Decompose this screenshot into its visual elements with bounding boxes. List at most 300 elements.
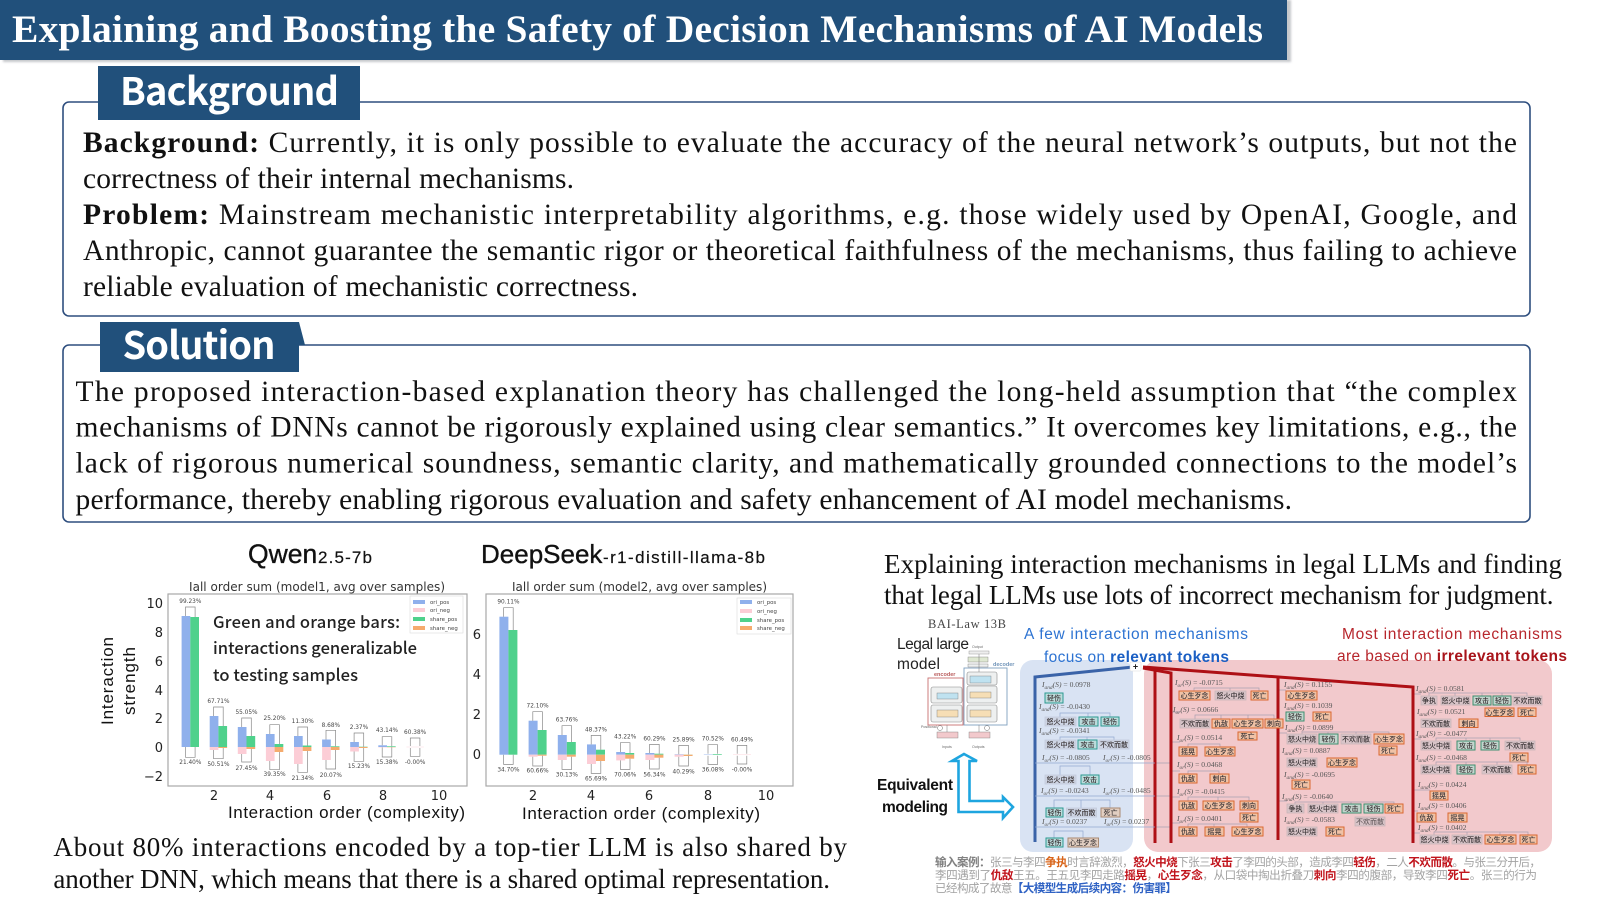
legend: ori_neg	[430, 608, 450, 614]
mechanism: -0.0640: 争执	[1288, 804, 1302, 814]
x axis title: Interaction order (complexity)	[228, 803, 465, 822]
bars: order 7	[673, 738, 695, 776]
mechanism: 0.0899: 不欢而散	[1342, 734, 1370, 744]
mechanism: -0.0805: (S)	[1110, 753, 1120, 762]
bar chart: Qwen interaction strength: Iall order sum (model1, avg over samples)	[189, 580, 445, 594]
mechanism: 0.1039: 死亡	[1315, 712, 1329, 722]
caption: legal LLM mechanisms: that legal LLMs use lots of incorrect mechanism for judgment.	[884, 580, 1554, 610]
mechanism: -0.0430: (S)	[1050, 702, 1059, 711]
mechanism: 0.0401: (S)	[1184, 814, 1194, 823]
bars: order 6	[320, 723, 342, 779]
text block: solution	[76, 376, 1517, 516]
bars: order 9: -0.00%	[732, 768, 753, 774]
encoder block: Positional	[921, 725, 937, 729]
y axis tick labels: 0	[155, 741, 163, 756]
label: equivalent modeling: Equivalent	[877, 777, 953, 794]
bars: order 6: 56.34%	[643, 773, 666, 779]
bars: order 9: 60.49%	[731, 738, 754, 744]
mechanism: 0.0406: 仇敌	[1420, 813, 1434, 823]
heading: relevant tokens	[1024, 626, 1248, 666]
bars: order 2: 67.71%	[207, 699, 230, 705]
mechanism: 0.0237: 轻伤	[1048, 838, 1062, 848]
caption: legal LLM mechanisms: Explaining interaction mechanisms in legal LLMs and finding	[884, 549, 1562, 579]
mechanism: -0.0243: I	[1102, 786, 1106, 795]
bars: order 3: 63.76%	[556, 718, 578, 724]
bars: order 7: 2.37%	[350, 725, 369, 731]
text block: background and problem: correctness of their internal mechanisms.	[83, 163, 574, 195]
legend	[737, 598, 791, 634]
bars: order 7	[348, 725, 370, 770]
y axis tick labels	[144, 597, 163, 785]
mechanism: -0.0583	[1283, 815, 1344, 837]
mechanism: 0.0666: I	[1172, 705, 1176, 714]
mechanism: -0.0415: = -0.0415	[1195, 787, 1225, 796]
mechanism: -0.0477: = -0.0477	[1437, 729, 1467, 738]
label: legal large model: model	[897, 656, 940, 673]
mechanism: -0.0415: I	[1176, 787, 1180, 796]
mechanism: 0.0514: 摇晃	[1181, 747, 1195, 757]
mechanism: -0.0715: 心生歹念	[1180, 691, 1208, 701]
encoder block: encoder	[934, 672, 956, 678]
text block: solution: The proposed interaction-based explanation theory has challenged the long-held assumption that “the complex	[76, 376, 1517, 408]
mechanism: 0.0581: 不欢而散	[1514, 696, 1542, 706]
mechanism: -0.0468: 怒火中烧	[1422, 765, 1450, 775]
mechanism: 0.1039: 轻伤	[1288, 712, 1302, 722]
mechanism: 0.0666: 刺向	[1267, 719, 1281, 729]
y axis tick labels: 10	[146, 597, 163, 612]
mechanism: 0.0424: 摇晃	[1432, 791, 1446, 801]
chart heading: Qwen: 2.5-7b	[318, 548, 372, 567]
mechanism: 0.0978: I	[1041, 680, 1045, 689]
mechanism: 0.0401	[1176, 814, 1263, 837]
bars: order 1: 90.11%	[497, 600, 520, 606]
bars: order 3	[235, 710, 258, 772]
annotation: green and orange bars: Green and orange bars:	[213, 609, 400, 633]
mechanism: -0.0805: 怒火中烧	[1046, 775, 1074, 785]
mechanism: 0.0401: 摇晃	[1208, 827, 1222, 837]
bars: order 3: 27.45%	[235, 766, 258, 772]
legend: share_neg	[430, 626, 458, 632]
mechanism: 0.0237: (S)	[1049, 817, 1059, 826]
mechanism: 0.0401: I	[1176, 814, 1180, 823]
mechanism: -0.0243: 死亡	[1104, 808, 1118, 818]
mechanism: -0.0341	[1038, 726, 1129, 750]
mechanism: 0.0521: and	[1420, 712, 1428, 718]
mechanism: -0.0243: (S)	[1048, 786, 1058, 795]
mechanism: -0.0430: and	[1042, 707, 1050, 713]
heading: relevant tokens: focus on relevant tokens	[1044, 649, 1229, 666]
mechanism: 0.1155: and	[1287, 685, 1295, 691]
mechanism: -0.0640: (S)	[1293, 792, 1302, 801]
mechanism: -0.0805: = -0.0805	[1060, 753, 1090, 762]
decoder block: Outputs	[972, 745, 985, 749]
mechanism: -0.0715: or	[1178, 683, 1183, 689]
mechanism: -0.0243: (S)	[1110, 786, 1120, 795]
x axis tick labels: 2	[210, 789, 218, 804]
mechanism: -0.0715: 死亡	[1252, 691, 1266, 701]
mechanism: 0.0521	[1416, 707, 1478, 729]
chart heading: DeepSeek	[481, 539, 765, 569]
mechanism: -0.0341: 怒火中烧	[1046, 740, 1074, 750]
y axis tick labels: −2	[144, 770, 163, 785]
mechanism: 0.0402: 心生歹念	[1486, 835, 1514, 845]
mechanism: -0.0415: 心生歹念	[1204, 801, 1232, 811]
text block: background and problem	[83, 127, 1517, 303]
mechanism: 0.0581: 怒火中烧	[1442, 696, 1470, 706]
caption: shared interactions: About 80% interactions encoded by a top-tier LLM is also shared by	[53, 832, 847, 862]
mechanism: -0.0640: 怒火中烧	[1309, 804, 1337, 814]
bars: order 4: 25.20%	[264, 716, 286, 722]
mechanism: 0.0237: = 0.0237	[1060, 817, 1087, 826]
text block: solution: mechanisms of DNNs cannot be rigorously explained using clear semantics.” It overcomes key limitations, e.g., the	[76, 412, 1517, 444]
mechanism: -0.0468: 不欢而散	[1483, 765, 1511, 775]
mechanism: 0.0514: I	[1176, 733, 1180, 742]
mechanism: -0.0243: or	[1044, 791, 1049, 797]
chart heading: DeepSeek: -r1-distill-llama-8b	[603, 548, 765, 567]
mechanism: -0.0243: 轻伤	[1048, 808, 1062, 818]
caption: shared interactions	[53, 832, 847, 894]
mechanism: -0.0715: 怒火中烧	[1216, 691, 1244, 701]
mechanism: 0.1155	[1283, 680, 1332, 701]
mechanism: 0.0899: 死亡	[1381, 746, 1395, 756]
bars: order 7: 25.89%	[673, 738, 695, 744]
mechanism: 0.0887: 心生歹念	[1328, 758, 1356, 768]
mechanism: -0.0415: (S)	[1184, 787, 1194, 796]
mechanism: 0.1039: = 0.1039	[1305, 701, 1332, 710]
heading: irrelevant tokens: are based on irrelevant tokens	[1337, 648, 1567, 665]
mechanism: 0.0899: 心生歹念	[1375, 734, 1403, 744]
mechanism: -0.0243	[1040, 786, 1151, 818]
mechanism: 0.0581: 轻伤	[1495, 696, 1509, 706]
mechanism: 0.0406: 摇晃	[1450, 813, 1464, 823]
mechanism: 0.1039: and	[1287, 706, 1295, 712]
mechanism: 0.0521: 不欢而散	[1422, 719, 1450, 729]
mechanism: 0.0666: = 0.0666	[1191, 705, 1218, 714]
mechanism: 0.0899: = 0.0899	[1306, 723, 1333, 732]
mechanism: 0.0237: 心生歹念	[1069, 838, 1097, 848]
panel: solution	[63, 315, 1530, 522]
mechanism: 0.0424	[1417, 780, 1467, 801]
mechanism: 0.0424: = 0.0424	[1439, 780, 1466, 789]
annotation: green and orange bars: interactions generalizable	[213, 635, 417, 659]
heading: background: Background	[120, 61, 339, 116]
mechanism: 0.0514: 心生歹念	[1206, 747, 1234, 757]
mechanism: 0.0899: 轻伤	[1322, 734, 1336, 744]
text block: input case: 李四遇到了仇敌王五。王五见李四走路摇晃，心生歹念，从口袋中掏出折叠刀刺向李四的腹部，导致李四死亡。张三的行为	[935, 867, 1537, 883]
mechanism: -0.0695: 死亡	[1294, 780, 1308, 790]
mechanism: 0.0899: 怒火中烧	[1288, 734, 1316, 744]
mechanism: -0.0341: = -0.0341	[1060, 726, 1090, 735]
mechanism: 0.0887: I	[1281, 746, 1285, 755]
mechanism: -0.0243: or	[1106, 791, 1111, 797]
mechanism: -0.0477: 死亡	[1512, 753, 1526, 763]
y axis tick labels: 2	[155, 712, 163, 727]
legend: ori_pos	[430, 600, 449, 606]
mechanism: 0.0514: = 0.0514	[1195, 733, 1222, 742]
column: OR interactions	[1172, 678, 1283, 837]
mechanism: 0.0424: I	[1417, 780, 1421, 789]
bars: order 1	[497, 600, 520, 774]
text block: solution: performance, thereby enabling rigorous evaluation and safety enhancement of AI model mechanisms.	[76, 484, 1292, 516]
mechanism: -0.0477	[1415, 729, 1535, 763]
chart heading: Qwen: Qwen	[248, 539, 317, 569]
mechanism: 0.0406: = 0.0406	[1439, 801, 1466, 810]
mechanism: -0.0715: I	[1174, 678, 1178, 687]
x axis tick labels: 6	[323, 789, 331, 804]
mechanism: 0.0237	[1041, 817, 1149, 848]
mechanism: 0.0666: or	[1176, 710, 1181, 716]
mechanism: 0.0468	[1176, 760, 1229, 784]
mechanism: 0.0521: I	[1416, 707, 1420, 716]
mechanism: -0.0430	[1038, 702, 1119, 727]
mechanism: 0.0899: (S)	[1296, 723, 1305, 732]
x axis tick labels: 10	[758, 789, 774, 804]
label: legal large model: Legal large	[897, 636, 969, 653]
mechanism: -0.0341: and	[1042, 731, 1050, 737]
mechanism: -0.0695: I	[1283, 770, 1287, 779]
mechanism: -0.0640: 不欢而散	[1356, 817, 1384, 827]
mechanism: 0.0666	[1172, 705, 1283, 742]
label: BAI-Law 13B: BAI-Law 13B	[928, 617, 1006, 631]
mechanism: -0.0468: 轻伤	[1459, 765, 1473, 775]
diagram: transformer encoder and decoder	[921, 645, 1015, 749]
bars: order 9: 60.38%	[404, 730, 427, 736]
x axis tick labels	[529, 789, 774, 804]
mechanism: -0.0415: or	[1180, 792, 1185, 798]
mechanism: -0.0243: = -0.0485	[1121, 786, 1151, 795]
mechanism: 0.0978: (S)	[1053, 680, 1062, 689]
bars: order 1: 34.70%	[497, 768, 520, 774]
mechanism: -0.0640: = -0.0640	[1303, 792, 1333, 801]
mechanism: -0.0477: 攻击	[1459, 741, 1473, 751]
mechanism: 0.0468: 刺向	[1212, 774, 1226, 784]
mechanism: -0.0583: I	[1283, 815, 1287, 824]
mechanism: -0.0805: or	[1045, 758, 1050, 764]
mechanism: 0.0402: and	[1421, 828, 1429, 834]
text block: input case	[935, 854, 1541, 896]
heading: irrelevant tokens	[1337, 626, 1567, 665]
x axis tick labels	[210, 789, 447, 804]
mechanism: -0.0341: 不欢而散	[1100, 740, 1128, 750]
mechanism: -0.0695: = -0.0695	[1305, 770, 1335, 779]
bar chart: Qwen interaction strength	[98, 580, 467, 822]
legend: ori_pos	[757, 600, 776, 606]
mechanism: -0.0415: 仇敌	[1181, 801, 1195, 811]
bars: order 2: 72.10%	[527, 704, 549, 710]
mechanism: 0.0899	[1284, 723, 1404, 756]
connector lines	[1143, 667, 1413, 843]
mechanism: 0.0581: 争执	[1422, 696, 1436, 706]
mechanism: -0.0640: I	[1281, 792, 1285, 801]
mechanism: -0.0477: (S)	[1427, 729, 1436, 738]
mechanism: 0.0978: and	[1045, 685, 1053, 691]
mechanism: -0.0341: 攻击	[1080, 740, 1094, 750]
mechanism: 0.0402: I	[1417, 823, 1421, 832]
bars: order 8	[376, 728, 399, 766]
x axis tick labels: 8	[379, 789, 387, 804]
y axis tick labels: 6	[473, 628, 481, 643]
icon: expand node	[1130, 662, 1141, 672]
mechanism: 0.0401: = 0.0401	[1195, 814, 1222, 823]
arrow: equivalent modeling	[952, 754, 1013, 818]
x axis title: Interaction order (complexity)	[522, 804, 760, 823]
text block: background and problem: Background: Currently, it is only possible to evaluate the accuracy of the neural network’s outputs, but not the	[83, 127, 1517, 159]
x axis tick labels: 8	[704, 789, 712, 804]
bars: order 5: 43.22%	[614, 735, 637, 741]
mechanism: 0.0581: I	[1415, 684, 1419, 693]
mechanism: 0.0666: (S)	[1180, 705, 1190, 714]
mechanism: -0.0243: 不欢而散	[1068, 808, 1096, 818]
decoder block: decoder	[993, 662, 1015, 668]
bars: order 3: 30.13%	[556, 773, 578, 779]
bars: order 2	[527, 704, 549, 775]
mechanism: 0.0402: 不欢而散	[1453, 835, 1481, 845]
bar chart: DeepSeek interaction strength: Iall order sum (model2, avg over samples)	[512, 580, 767, 594]
mechanism: 0.0468: I	[1176, 760, 1180, 769]
mechanism: -0.0805: I	[1102, 753, 1106, 762]
mechanism: -0.0415	[1176, 787, 1258, 823]
x axis tick labels: 10	[431, 789, 447, 804]
label: equivalent modeling	[877, 777, 953, 816]
mechanism: 0.0887: (S)	[1293, 746, 1302, 755]
mechanism: -0.0477: 怒火中烧	[1422, 741, 1450, 751]
y axis tick labels: 0	[473, 748, 481, 763]
bars: order 6	[643, 737, 666, 779]
mechanism: 0.0424: (S)	[1429, 780, 1438, 789]
annotation: green and orange bars: to testing samples	[213, 662, 358, 686]
mechanism: 0.0468: 仇敌	[1181, 774, 1195, 784]
bars: order 1: 21.40%	[179, 760, 202, 766]
bars: order 6: 60.29%	[643, 737, 666, 743]
column: AND interactions, middle	[1281, 680, 1404, 837]
title banner	[0, 0, 1291, 62]
bar chart: DeepSeek interaction strength	[473, 580, 793, 823]
mechanism: 0.0581: 死亡	[1520, 708, 1534, 718]
bars: order 9	[404, 730, 427, 766]
text block: background and problem: Anthropic, cannot guarantee the semantic rigor or theoretical faithfulness of the mechanisms, thus failing to achieve	[83, 235, 1517, 267]
bars: order 3	[556, 718, 578, 779]
text block: input case: 已经构成了故意【大模型生成后续内容：伤害罪】	[935, 880, 1177, 896]
mechanism: 0.1155: (S)	[1295, 680, 1304, 689]
mechanism: 0.0237: or	[1107, 822, 1112, 828]
mechanism: 0.0978	[1041, 680, 1091, 704]
mechanism: 0.0581: 心生歹念	[1486, 708, 1514, 718]
legend: ori_neg	[757, 609, 777, 615]
column: AND interactions, right	[1415, 684, 1542, 845]
y axis tick labels: 4	[473, 668, 481, 683]
mechanism: -0.0805: or	[1106, 758, 1111, 764]
mechanism: -0.0415: 死亡	[1242, 813, 1256, 823]
mechanism: 0.0402	[1417, 823, 1537, 845]
mechanism: -0.0805: (S)	[1049, 753, 1059, 762]
mechanism: 0.0402: (S)	[1429, 823, 1438, 832]
mechanism: 0.0237: I	[1103, 817, 1107, 826]
mechanism: 0.0401: 心生歹念	[1234, 827, 1262, 837]
bars: order 4: 48.37%	[585, 728, 608, 734]
bars: order 2: 60.66%	[527, 769, 549, 775]
bars: order 7: 40.29%	[673, 770, 695, 776]
bars: order 1	[179, 599, 202, 766]
bars: order 6: 20.07%	[320, 773, 342, 779]
mechanism: -0.0640: and	[1285, 797, 1293, 803]
mechanism: 0.1155: I	[1283, 680, 1287, 689]
mechanism: -0.0468: = -0.0468	[1437, 753, 1467, 762]
mechanism: -0.0468: (S)	[1427, 753, 1436, 762]
bars: order 9: -0.00%	[405, 760, 426, 766]
text block: background and problem: Problem: Mainstream mechanistic interpretability algorithms, e.g. those widely used by OpenAI, Google, and	[83, 199, 1517, 231]
mechanism: -0.0477: 轻伤	[1483, 741, 1497, 751]
mechanism: -0.0640: 死亡	[1387, 804, 1401, 814]
mechanism: 0.0401: or	[1180, 819, 1185, 825]
mechanism: -0.0695: (S)	[1295, 770, 1304, 779]
mechanism: 0.0514: (S)	[1184, 733, 1194, 742]
mechanism: 0.0402: = 0.0402	[1439, 823, 1466, 832]
encoder block: Inputs	[942, 745, 952, 749]
mechanism: -0.0695: and	[1287, 775, 1295, 781]
bars: order 4	[585, 728, 608, 783]
label: equivalent modeling: modeling	[882, 799, 948, 816]
mechanism: -0.0805: I	[1041, 753, 1045, 762]
mechanism: -0.0477: I	[1415, 729, 1419, 738]
mechanism: 0.0581: 攻击	[1475, 696, 1489, 706]
mechanism: 0.0581: and	[1419, 689, 1427, 695]
mechanism: -0.0805: 攻击	[1083, 775, 1097, 785]
mechanism: -0.0695	[1283, 770, 1335, 790]
mechanism: 0.0887: 怒火中烧	[1288, 758, 1316, 768]
chart heading: DeepSeek: DeepSeek	[481, 539, 603, 569]
mechanism: 0.0978: = 0.0978	[1063, 680, 1090, 689]
mechanism: -0.0715: (S)	[1182, 678, 1192, 687]
mechanism: 0.0978: 轻伤	[1047, 694, 1061, 704]
bars: order 8: 43.14%	[376, 728, 399, 734]
mechanism: 0.1155: 心生歹念	[1288, 691, 1316, 701]
mechanism: 0.0581	[1415, 684, 1542, 718]
bars: order 4	[264, 716, 286, 778]
y axis tick labels: 2	[473, 708, 481, 723]
encoder block	[921, 672, 963, 749]
bars: order 2	[207, 699, 230, 768]
bars: order 8	[702, 737, 724, 774]
mechanism: 0.0402: 死亡	[1522, 835, 1536, 845]
bars: order 2: 50.51%	[207, 762, 230, 768]
mechanism: 0.0581: = 0.0581	[1437, 684, 1464, 693]
bars: order 7: 15.23%	[348, 764, 370, 770]
panel: irrelevant interaction mechanisms	[1143, 660, 1552, 852]
y axis tick labels: 6	[155, 655, 163, 670]
mechanism: 0.0887: and	[1285, 751, 1293, 757]
mechanism: 0.0666: 死亡	[1240, 732, 1254, 742]
legend	[410, 596, 463, 633]
mechanism: 0.0237: = 0.0237	[1122, 817, 1149, 826]
y axis tick labels	[473, 628, 481, 763]
mechanism: 0.1155: = 0.1155	[1305, 680, 1332, 689]
x axis tick labels: 4	[266, 789, 274, 804]
bars: order 5: 21.34%	[292, 776, 314, 782]
heading: relevant tokens: A few interaction mechanisms	[1024, 626, 1248, 643]
bars: order 4: 39.35%	[264, 772, 286, 778]
heading: irrelevant tokens: Most interaction mechanisms	[1342, 626, 1562, 643]
mechanism: -0.0430: 攻击	[1082, 717, 1096, 727]
mechanism: -0.0430: 怒火中烧	[1046, 717, 1074, 727]
mechanism: 0.0521: (S)	[1428, 707, 1437, 716]
mechanism: 0.0401: 仇敌	[1181, 827, 1195, 837]
mechanism: 0.0468: = 0.0468	[1195, 760, 1222, 769]
mechanism: 0.0581: (S)	[1427, 684, 1436, 693]
mechanism: 0.0666: 心生歹念	[1234, 719, 1262, 729]
mechanism: 0.0406	[1417, 801, 1467, 823]
mechanism: -0.0477: and	[1419, 734, 1427, 740]
mechanism: -0.0715: = -0.0715	[1193, 678, 1223, 687]
